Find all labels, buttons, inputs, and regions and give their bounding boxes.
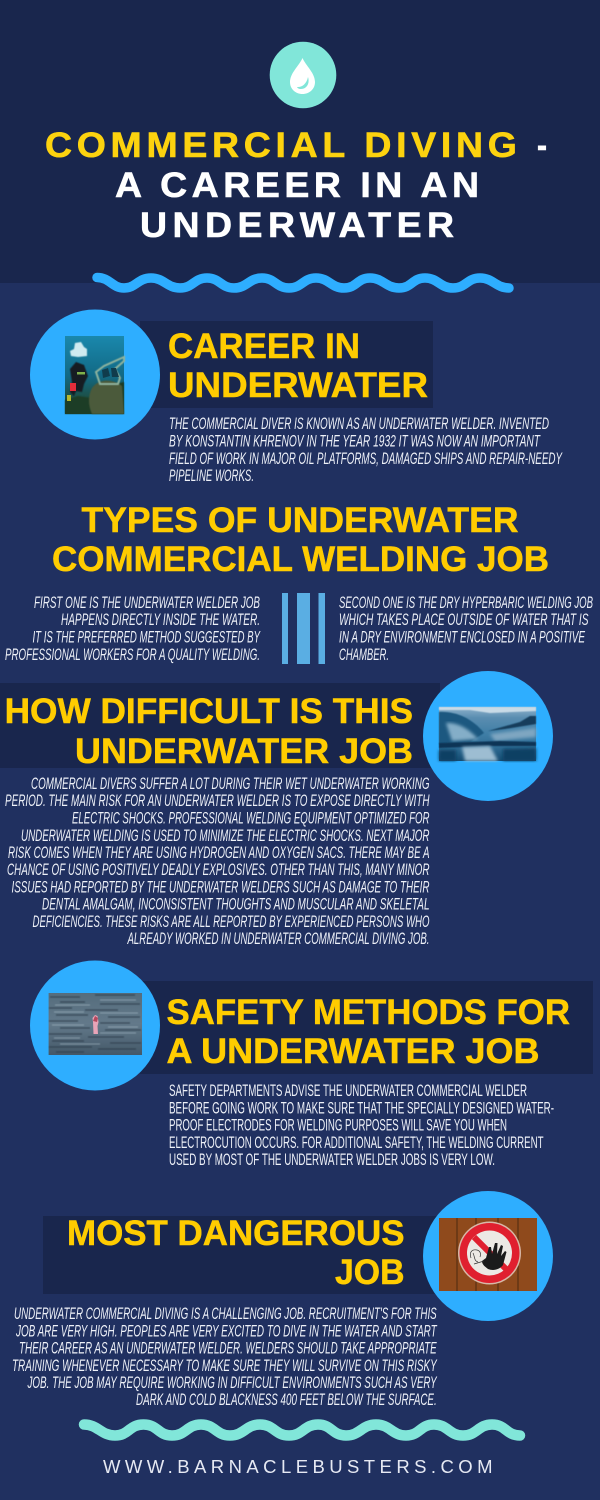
heading: COMMERCIAL WELDING JOB — [52, 540, 549, 579]
panel: most dangerous job — [12, 1191, 553, 1409]
icon: water drop — [270, 42, 336, 108]
title: A CAREER IN AN — [115, 165, 479, 205]
heading — [168, 327, 428, 405]
heading bar — [0, 683, 440, 768]
text: second type: CHAMBER. — [339, 646, 389, 664]
icon circle: diver — [30, 310, 160, 440]
heading: UNDERWATER — [168, 366, 428, 405]
heading bar — [140, 321, 433, 408]
text: first type — [5, 594, 261, 664]
title — [45, 125, 547, 245]
icon circle: sea wave — [423, 671, 553, 801]
wave divider: top — [97, 278, 509, 288]
panel: career in underwater — [30, 310, 563, 485]
header band — [0, 0, 600, 283]
body text — [169, 1082, 554, 1169]
title: UNDERWATER — [140, 205, 454, 245]
text: first type: HAPPENS DIRECTLY INSIDE THE WATER. — [61, 611, 260, 629]
panel: safety methods — [30, 960, 593, 1169]
body text — [5, 775, 430, 948]
heading: MOST DANGEROUS — [67, 1214, 404, 1253]
heading — [166, 993, 570, 1071]
icon circle: no entry sign — [423, 1191, 553, 1321]
title: COMMERCIAL DIVING — [45, 125, 517, 165]
heading — [5, 692, 413, 771]
heading — [52, 501, 549, 579]
title: - — [537, 126, 547, 165]
heading: CAREER IN — [168, 327, 360, 366]
heading bar — [43, 1216, 438, 1294]
text: second type — [339, 594, 593, 664]
footer url: WWW.BARNACLEBUSTERS.COM — [103, 1456, 493, 1477]
divider bars — [282, 593, 325, 664]
body text — [12, 1305, 438, 1409]
heading: UNDERWATER JOB — [75, 732, 413, 771]
heading: SAFETY METHODS FOR — [166, 993, 570, 1032]
body text — [169, 415, 563, 485]
icon circle: hand above water — [30, 960, 160, 1090]
wave divider: bottom — [84, 1424, 520, 1436]
panel: how difficult — [0, 671, 553, 948]
body text: PIPELINE WORKS. — [169, 467, 254, 485]
heading: A UNDERWATER JOB — [166, 1032, 540, 1071]
heading: TYPES OF UNDERWATER — [82, 501, 518, 540]
text: first type: IT IS THE PREFERRED METHOD SUGGESTED BY — [32, 628, 261, 646]
panel: types of welding job — [5, 501, 593, 664]
heading — [67, 1214, 404, 1292]
text: first type: FIRST ONE IS THE UNDERWATER WELDER JOB — [34, 594, 260, 612]
heading bar — [140, 981, 593, 1074]
heading: JOB — [335, 1253, 404, 1292]
text: first type: PROFESSIONAL WORKERS FOR A QUALITY WELDING. — [5, 646, 260, 664]
heading: HOW DIFFICULT IS THIS — [5, 692, 413, 731]
